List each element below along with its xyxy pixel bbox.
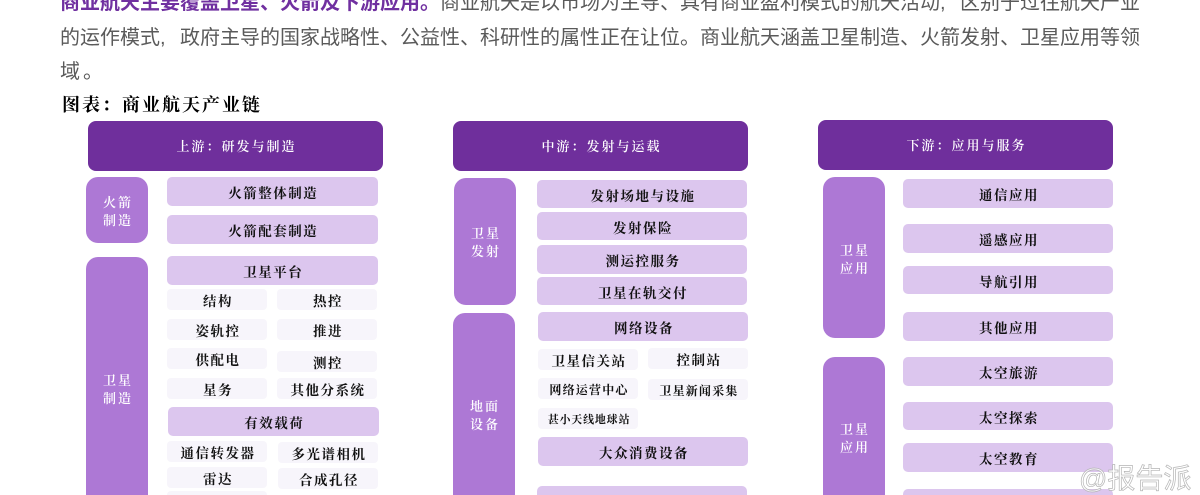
- item: [903, 266, 1113, 294]
- item: 雷达: [203, 472, 233, 487]
- item: [277, 351, 377, 372]
- category: satellite applications: 应用: [840, 260, 870, 276]
- heading: upstream: 上游：研发与制造: [176, 138, 296, 154]
- heading: midstream: [453, 120, 748, 170]
- subheading: payload: [168, 407, 378, 436]
- panel: downstream: [818, 120, 1113, 495]
- category: ground equipment: [453, 312, 515, 495]
- category: ground equipment: 设备: [470, 417, 500, 432]
- item: 测控: [313, 356, 343, 371]
- heading: downstream: 下游：应用与服务: [906, 138, 1026, 152]
- category: satellite manufacturing: 制造: [103, 391, 133, 406]
- item: 导航引用: [979, 274, 1039, 290]
- item: [648, 348, 748, 369]
- panel: upstream: [86, 121, 383, 495]
- item: [167, 348, 267, 369]
- item: 卫星新闻采集: [659, 384, 739, 398]
- category: satellite manufacturing: [86, 256, 148, 495]
- item, cropped: [903, 489, 1113, 495]
- item: 多光谱相机: [292, 447, 366, 462]
- panel: midstream: [453, 121, 748, 495]
- item: [167, 467, 267, 488]
- item: 控制站: [676, 353, 722, 368]
- item: [278, 468, 378, 489]
- item: 通信应用: [979, 188, 1039, 203]
- category: satellite launch: 卫星: [471, 226, 501, 241]
- item: [278, 442, 378, 463]
- item: 发射场地与设施: [590, 188, 696, 204]
- item: [648, 379, 748, 400]
- item, cropped: [167, 491, 267, 495]
- category: rocket manufacturing: [86, 177, 148, 243]
- item: [277, 319, 377, 340]
- item: 供配电: [196, 353, 240, 368]
- subheading: network equipment: 网络设备: [614, 321, 674, 336]
- subheading: consumer equipment: 大众消费设备: [599, 446, 689, 461]
- subheading: satellite platform: [167, 256, 378, 284]
- item: 其他分系统: [290, 383, 366, 398]
- watermark: @报告派: [1079, 463, 1191, 494]
- category: satellite applications: [823, 177, 885, 338]
- category: satellite launch: [454, 178, 516, 304]
- item: 其他应用: [979, 321, 1039, 336]
- item: [537, 212, 747, 240]
- item: [537, 276, 747, 305]
- item: [167, 215, 378, 244]
- subheading: payload: 有效载荷: [244, 416, 304, 431]
- item: 合成孔径: [299, 473, 359, 488]
- paragraph line 3: 域。: [60, 61, 106, 83]
- item: [538, 349, 638, 370]
- item: 姿轨控: [196, 324, 240, 339]
- subheading: network equipment: [538, 312, 748, 340]
- category: space applications: 卫星: [840, 422, 870, 437]
- category: space applications: [823, 357, 885, 495]
- item: [903, 402, 1113, 430]
- item: [538, 378, 638, 399]
- item: 太空教育: [979, 452, 1039, 467]
- category: satellite manufacturing: 卫星: [103, 373, 133, 388]
- paragraph line 2: ,: [160, 27, 166, 49]
- intro paragraph: [60, 0, 1140, 83]
- item: [903, 179, 1113, 208]
- heading: upstream: [88, 120, 383, 170]
- item: [903, 312, 1113, 340]
- category: satellite applications: 卫星: [840, 242, 870, 258]
- item: 火箭整体制造: [228, 186, 318, 201]
- heading: downstream: [818, 120, 1113, 170]
- heading: midstream: 中游：发射与运载: [541, 138, 662, 154]
- item: [277, 378, 377, 399]
- item: 推进: [313, 324, 343, 339]
- category: ground equipment: 地面: [470, 399, 500, 414]
- item: [277, 289, 377, 310]
- item: [167, 441, 267, 462]
- item: 发射保险: [613, 220, 673, 236]
- paragraph line 2: 的运作模式 政府主导的国家战略性、公益性、科研性的属性正在让位。商业航天涵盖卫星制造、火箭发射、卫星应用等领: [60, 27, 1140, 49]
- item: 火箭配套制造: [228, 224, 318, 239]
- item: 太空旅游: [979, 366, 1039, 381]
- item: 网络运营中心: [549, 383, 629, 397]
- subheading: satellite platform: 卫星平台: [243, 265, 303, 280]
- item: [903, 443, 1113, 472]
- item: 通信转发器: [180, 446, 256, 461]
- item: 卫星在轨交付: [598, 286, 688, 300]
- item: [537, 245, 747, 274]
- item: [167, 378, 267, 399]
- item: [538, 408, 638, 429]
- item: [903, 224, 1113, 252]
- chart title: 图表：商业航天产业链: [62, 95, 262, 115]
- category: space applications: 应用: [840, 440, 870, 455]
- item: 热控: [313, 294, 343, 309]
- item: [903, 357, 1113, 386]
- category: satellite launch: 发射: [471, 244, 501, 259]
- item: 测运控服务: [606, 254, 680, 269]
- item: 太空探索: [979, 410, 1039, 426]
- category: rocket manufacturing: 火箭: [103, 195, 133, 210]
- item: 星务: [203, 383, 233, 398]
- item: [167, 289, 267, 310]
- item, cropped: [537, 486, 747, 495]
- category: rocket manufacturing: 制造: [103, 213, 133, 228]
- item: 卫星信关站: [552, 354, 626, 369]
- subheading: consumer equipment: [538, 437, 748, 466]
- item: 结构: [203, 294, 233, 309]
- item: [537, 180, 747, 208]
- item: 甚小天线地球站: [548, 414, 630, 426]
- item: 遥感应用: [979, 233, 1039, 248]
- item: [167, 177, 378, 206]
- item: [167, 319, 267, 340]
